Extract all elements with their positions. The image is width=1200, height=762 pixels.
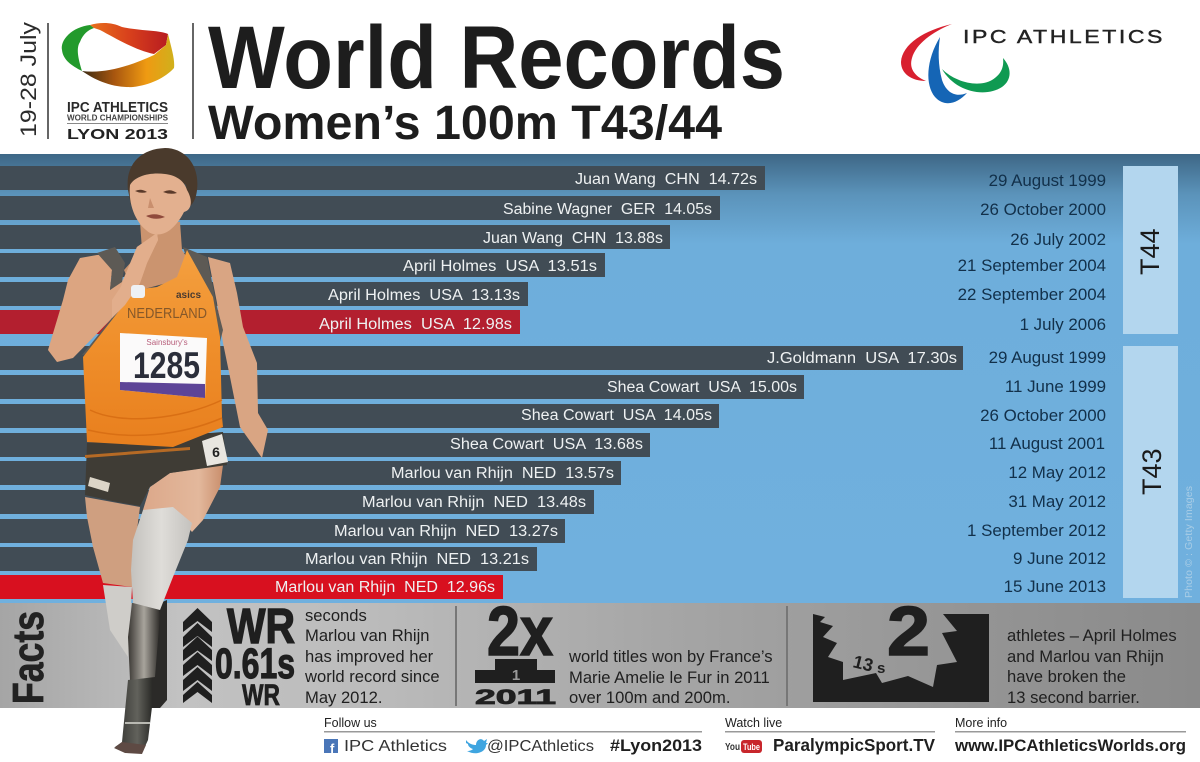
shorts: 6	[212, 444, 220, 460]
foot sole	[114, 742, 146, 754]
athlete photo illustration	[48, 148, 268, 754]
footer: follow us: #Lyon2013	[610, 736, 702, 755]
bar labels: April Holmes USA 13.51s	[403, 258, 597, 275]
bar labels: April Holmes USA 12.98s	[319, 316, 512, 333]
WR graphic	[215, 600, 295, 712]
record dates: 1 July 2006	[1020, 315, 1106, 334]
footer: more info: www.IPCAthleticsWorlds.org	[954, 736, 1186, 755]
rear thigh	[85, 497, 140, 587]
fact text: and Marlou van Rhijn	[1007, 647, 1164, 666]
bar labels: Marlou van Rhijn NED 13.48s	[362, 494, 586, 511]
bar chart: T44 bars	[0, 166, 765, 334]
icon: mobius ring	[62, 23, 174, 87]
footer: follow us: IPC Athletics	[344, 738, 447, 755]
footer: watch live: Watch live	[725, 716, 782, 730]
footer: watch live: ParalympicSport.TV	[773, 735, 935, 755]
title: Women’s 100m T43/44	[208, 97, 722, 150]
championships logo: LYON 2013	[67, 126, 168, 143]
vest brand and team name: asics	[176, 290, 201, 301]
bar labels: Marlou van Rhijn NED 12.96s	[275, 579, 495, 596]
panel: records chart background	[0, 154, 1200, 604]
category: T44: T44	[1135, 228, 1165, 275]
neck and chest	[124, 222, 190, 292]
icon: 2x podium	[475, 592, 557, 709]
record dates: 26 October 2000	[980, 406, 1106, 425]
footer: follow us	[324, 716, 702, 756]
title: World Records	[208, 7, 785, 107]
category: T43	[1123, 346, 1178, 598]
icon: agitos	[901, 24, 1010, 103]
championships logo: WORLD CHAMPIONSHIPS	[67, 114, 169, 122]
record dates: 1 September 2012	[967, 521, 1106, 540]
IPC Athletics logo: IPC ATHLETICS	[963, 27, 1165, 47]
prosthetic blade	[115, 677, 152, 753]
fact text: world titles won by France’s	[568, 647, 773, 666]
IPC Athletics logo	[901, 24, 1165, 103]
icon: 2x podium: 1	[512, 667, 520, 684]
record dates: 31 May 2012	[1008, 492, 1106, 511]
bar labels: April Holmes USA 13.13s	[328, 287, 520, 304]
record dates: 12 May 2012	[1008, 463, 1106, 482]
category: T43: T43	[1137, 448, 1167, 495]
fact text: over 100m and 200m.	[569, 688, 730, 707]
icon: twitter	[466, 739, 488, 753]
record dates	[958, 171, 1106, 596]
WR graphic: WR	[227, 600, 295, 654]
prosthetic back plate	[148, 600, 167, 708]
icon: chevrons	[183, 608, 212, 703]
fact text: has improved her	[305, 647, 434, 666]
photo credit: Photo © : Getty Images	[1183, 486, 1195, 598]
icon: facebook: f	[330, 741, 335, 756]
prosthetic socket	[128, 603, 160, 680]
hand over chest	[118, 233, 158, 305]
bar labels: Marlou van Rhijn NED 13.27s	[334, 523, 558, 540]
record dates: 29 August 1999	[989, 171, 1106, 190]
footer: more info	[954, 716, 1186, 755]
fact text: have broken the	[1007, 667, 1126, 686]
icon: 2x podium: 2011	[475, 686, 557, 709]
fact text	[304, 606, 440, 707]
icon: 2x podium: 2x	[487, 592, 553, 670]
icon: youtube	[725, 740, 762, 753]
bar labels: Shea Cowart USA 15.00s	[607, 379, 797, 396]
fact: improvement	[183, 600, 440, 712]
record dates: 21 September 2004	[958, 256, 1106, 275]
fact text: world record since	[304, 667, 440, 686]
icon: youtube: You	[725, 742, 740, 753]
footer: more info: More info	[955, 716, 1007, 730]
vest folds	[88, 400, 222, 435]
fact text: May 2012.	[305, 688, 382, 707]
fact text	[1007, 626, 1177, 707]
icon: broken barrier: 13	[851, 651, 875, 676]
fact text: Marie Amelie le Fur in 2011	[569, 668, 770, 687]
bar labels: Juan Wang CHN 14.72s	[575, 171, 757, 188]
fact text: seconds	[305, 606, 367, 625]
hair	[128, 148, 197, 208]
record dates: 26 October 2000	[980, 200, 1106, 219]
bar labels: Marlou van Rhijn NED 13.57s	[391, 465, 614, 482]
icon: broken barrier: s	[877, 660, 885, 677]
record dates: 11 August 2001	[989, 434, 1105, 453]
orange vest	[83, 250, 223, 447]
record dates: 29 August 1999	[989, 348, 1106, 367]
bar labels: Marlou van Rhijn NED 13.21s	[305, 551, 529, 568]
WR graphic: WR	[242, 679, 280, 712]
category: T44	[1123, 166, 1178, 334]
bar labels: Shea Cowart USA 13.68s	[450, 436, 643, 453]
bar labels	[275, 171, 957, 596]
fact text: 13 second barrier.	[1007, 688, 1140, 707]
bar labels: J.Goldmann USA 17.30s	[767, 350, 957, 367]
footer: follow us: @IPCAthletics	[487, 738, 594, 755]
championships logo	[62, 23, 174, 143]
vest straps	[82, 247, 223, 355]
facial features	[135, 190, 177, 219]
shorts	[85, 432, 228, 506]
record dates: 26 July 2002	[1010, 230, 1106, 249]
icon: broken barrier	[813, 592, 989, 702]
knee sleeve	[131, 507, 192, 610]
hand overlap	[112, 233, 158, 318]
bar labels: Shea Cowart USA 14.05s	[521, 407, 712, 424]
record dates: 11 June 1999	[1005, 377, 1106, 396]
header: date: 19-28 July	[16, 22, 41, 137]
face	[130, 173, 191, 234]
footer: follow us: Follow us	[324, 716, 377, 730]
icon: facebook	[324, 739, 338, 756]
race bib	[120, 333, 207, 398]
facts heading: Facts	[4, 611, 53, 704]
race bib: Sainsbury’s	[146, 338, 188, 347]
title	[208, 7, 785, 150]
bar chart: T43 bars	[0, 346, 963, 599]
icon: youtube: Tube	[743, 742, 760, 752]
fact text	[568, 647, 773, 707]
fact text: athletes – April Holmes	[1007, 626, 1177, 645]
left arm	[48, 233, 158, 362]
record dates: 22 September 2004	[958, 285, 1106, 304]
record dates: 9 June 2012	[1013, 549, 1106, 568]
WR graphic: 0.61s	[215, 640, 295, 688]
logo text: IPC ATHLETICS	[67, 100, 168, 116]
fact text: Marlou van Rhijn	[305, 626, 430, 645]
race bib: 1285	[133, 345, 200, 386]
panel: facts	[0, 603, 1200, 708]
blade highlight	[125, 722, 150, 724]
bar labels: Juan Wang CHN 13.88s	[483, 230, 663, 247]
footer: watch live	[725, 716, 935, 755]
right arm	[208, 257, 268, 458]
vest brand and team name	[127, 285, 207, 322]
fact: 13 second barrier	[813, 592, 1177, 707]
bar labels: Sabine Wagner GER 14.05s	[503, 201, 712, 218]
icon: broken barrier: 2	[887, 592, 930, 670]
record dates: 15 June 2013	[1004, 577, 1106, 596]
fact: world titles	[475, 592, 773, 709]
rear leg sleeve	[103, 585, 132, 657]
vest brand and team name: NEDERLAND	[127, 305, 207, 322]
front thigh	[143, 465, 223, 532]
